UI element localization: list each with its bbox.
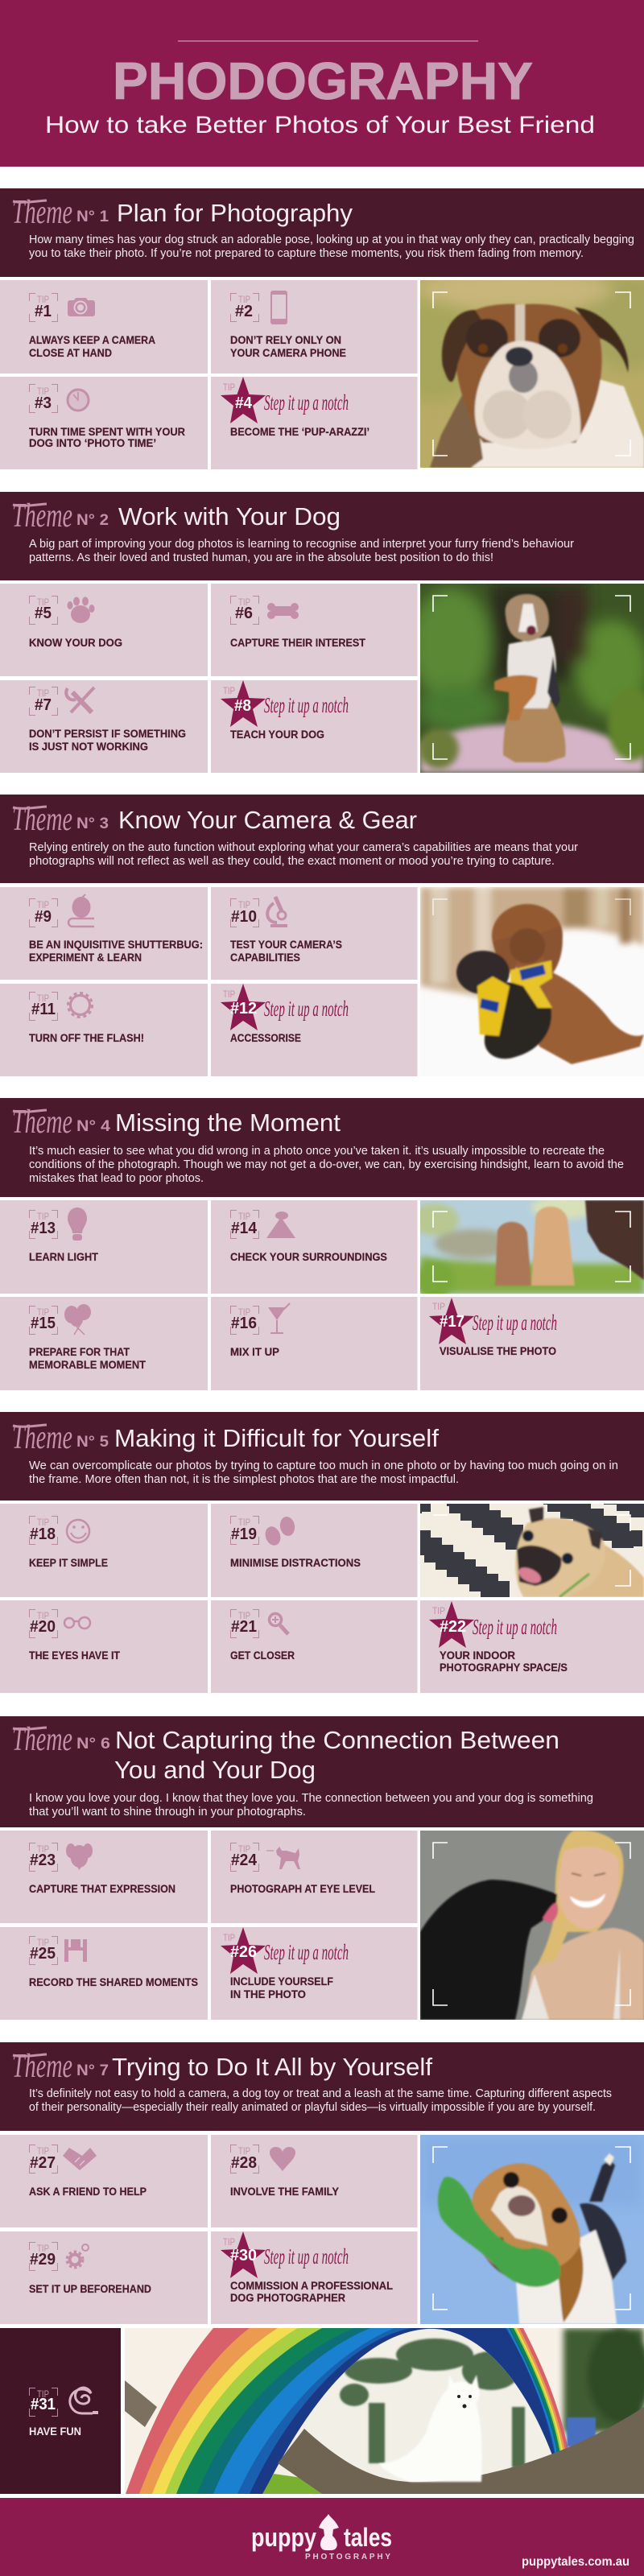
tip 26: TIP <box>223 1932 235 1943</box>
tip 7 <box>0 680 208 773</box>
tip 13: TIP <box>37 1211 49 1222</box>
tip label: EXPERIMENT & LEARN <box>29 952 142 964</box>
tip 18: #18 <box>30 1525 56 1543</box>
tip 20 <box>0 1600 208 1693</box>
icon: martini <box>268 1303 290 1333</box>
tip label: MEMORABLE MOMENT <box>29 1359 147 1371</box>
tip label: ACCESSORISE <box>230 1032 301 1044</box>
theme label: Theme <box>12 801 72 838</box>
panel: theme 3 <box>0 795 644 883</box>
icon: light bulb <box>68 1208 87 1241</box>
tip 24 <box>211 1831 417 1923</box>
tip 3: TIP <box>37 386 49 397</box>
step it up script: Step it up a notch <box>264 1940 349 1964</box>
icon: floppy disk <box>64 1939 87 1962</box>
tip 30: #30 <box>230 2247 257 2264</box>
tip 20: #20 <box>30 1618 56 1636</box>
footer banner <box>0 2498 644 2576</box>
theme label: N° 2 <box>76 512 109 529</box>
tip 13 <box>0 1200 208 1294</box>
icon: mountain <box>266 1212 295 1238</box>
tip 13: #13 <box>31 1220 56 1237</box>
tip 29: #29 <box>30 2251 56 2268</box>
tip label: KNOW YOUR DOG <box>29 637 122 649</box>
tip 4 <box>211 377 417 469</box>
icon: butterfly <box>262 1516 296 1547</box>
step it up script: Step it up a notch <box>264 390 349 415</box>
tip label <box>29 728 186 753</box>
tip 4: #4 <box>235 394 253 412</box>
photo: woman and black dog <box>420 1831 644 2020</box>
tip label: YOUR CAMERA PHONE <box>230 347 346 359</box>
tip label: VISUALISE THE PHOTO <box>440 1345 556 1357</box>
tip 22: TIP <box>432 1605 445 1616</box>
header banner <box>0 0 644 167</box>
icon: paw <box>68 597 95 623</box>
tip 8: TIP <box>223 685 235 696</box>
tip 3 <box>0 377 208 469</box>
tip label: ALWAYS KEEP A CAMERA <box>29 334 155 346</box>
tip 1: TIP <box>37 294 49 305</box>
tip 20: TIP <box>37 1610 49 1621</box>
icon: sun <box>68 993 92 1018</box>
tip 26: #26 <box>230 1943 257 1961</box>
title: PHODOGRAPHY <box>113 52 533 110</box>
tip 5: TIP <box>37 597 49 608</box>
intro text: you to take their photo. If you’re not prepared to capture these moments, you risk them fading from memory. <box>29 247 584 260</box>
tip 21 <box>211 1600 417 1693</box>
tip label: TEST YOUR CAMERA’S <box>230 939 342 951</box>
tip 18 <box>0 1504 208 1597</box>
tip 23: TIP <box>37 1843 49 1855</box>
tip label <box>29 426 185 449</box>
icon: glasses <box>64 1617 90 1629</box>
tip 9 <box>0 887 208 980</box>
tip label: PREPARE FOR THAT <box>29 1346 130 1358</box>
tip 3: #3 <box>35 394 52 412</box>
tip 12 <box>211 984 417 1076</box>
intro text: that you’ll want to shine through in your photographs. <box>29 1806 306 1818</box>
tip 28: TIP <box>238 2145 250 2157</box>
tip label: COMMISSION A PROFESSIONAL <box>230 2280 393 2292</box>
tip 27: #27 <box>30 2154 56 2172</box>
intro text <box>29 1792 593 1818</box>
tip label: ASK A FRIEND TO HELP <box>29 2186 147 2198</box>
icon: handshake <box>63 2148 97 2170</box>
tip label: TURN TIME SPENT WITH YOUR <box>29 426 185 438</box>
photo: bulldog <box>420 280 644 468</box>
tip label: LEARN LIGHT <box>29 1251 99 1263</box>
icon: dog expression <box>66 1843 93 1870</box>
tip 31: #31 <box>31 2396 56 2413</box>
theme label: Theme <box>12 497 72 535</box>
tip 21: #21 <box>231 1618 257 1636</box>
photo: white dog in rainbow <box>125 2326 644 2494</box>
tip 19 <box>211 1504 417 1597</box>
tip 22: #22 <box>440 1618 466 1636</box>
tip 12: #12 <box>230 1000 257 1018</box>
tip label: SET IT UP BEFOREHAND <box>29 2283 151 2295</box>
intro text: It’s much easier to see what you did wrong in a photo once you’ve taken it. it’s usually impossible to recreate the <box>29 1145 605 1158</box>
tip 16: #16 <box>231 1315 257 1332</box>
logo: puppy <box>251 2523 316 2552</box>
heading: You and Your Dog <box>114 1756 316 1784</box>
icon: heart <box>270 2147 295 2171</box>
tip label <box>230 334 346 359</box>
panel: theme 4 <box>0 1098 644 1197</box>
icon: hose spiral <box>70 2388 98 2413</box>
intro text: of their personality—especially their really animated or playful sides—is virtually impossible if you are by yourself. <box>29 2101 596 2114</box>
tip 8 <box>211 680 417 773</box>
heading <box>114 1726 559 1784</box>
tip label: INCLUDE YOURSELF <box>230 1975 333 1988</box>
icon: phone <box>270 291 287 324</box>
tip 11: TIP <box>37 993 49 1004</box>
tip 28 <box>211 2135 417 2227</box>
intro text <box>29 1459 618 1486</box>
tip label: CAPTURE THAT EXPRESSION <box>29 1883 175 1895</box>
tip label: THE EYES HAVE IT <box>29 1649 121 1662</box>
tip 25 <box>0 1927 208 2020</box>
tip 27 <box>0 2135 208 2227</box>
step it up script: Step it up a notch <box>473 1615 557 1639</box>
tip 2: TIP <box>238 294 250 305</box>
intro text: mistakes that lead to poor photos. <box>29 1172 204 1185</box>
tip 6 <box>211 584 417 676</box>
panel: theme 5 <box>0 1412 644 1501</box>
icon: smile <box>67 1520 89 1542</box>
logo dog silhouette <box>319 2514 339 2550</box>
tip label: TEACH YOUR DOG <box>230 729 324 741</box>
intro text: Relying entirely on the auto function without exploring what your camera’s capabilities are means that your <box>29 841 578 854</box>
intro text <box>29 233 634 260</box>
tip label: PHOTOGRAPH AT EYE LEVEL <box>230 1883 375 1895</box>
tip 6: TIP <box>238 597 250 608</box>
tip label: CHECK YOUR SURROUNDINGS <box>230 1251 387 1263</box>
tip label: KEEP IT SIMPLE <box>29 1557 108 1569</box>
intro text: It’s definitely not easy to hold a camera, a dog toy or treat and a leash at the same time. Capturing different aspects <box>29 2087 612 2100</box>
icon: balloons <box>64 1304 91 1335</box>
tip 1 <box>0 280 208 374</box>
theme label: Theme <box>12 1104 72 1141</box>
tip 6: #6 <box>235 605 253 622</box>
tip 17: #17 <box>440 1313 464 1331</box>
tip 10: #10 <box>231 908 257 926</box>
intro text <box>29 841 578 868</box>
tip 24: TIP <box>238 1843 250 1855</box>
theme label: N° 3 <box>76 815 109 832</box>
icon: clock <box>68 390 89 411</box>
logo: PHOTOGRAPHY <box>305 2553 390 2562</box>
tip 8: #8 <box>234 697 251 715</box>
tip 15 <box>0 1297 208 1390</box>
intro text: patterns. As their loved and trusted human, you are in the absolute best position to do this! <box>29 551 493 564</box>
photo: australian shepherd <box>411 584 644 773</box>
tip 14: TIP <box>238 1211 250 1222</box>
tip 23 <box>0 1831 208 1923</box>
heading: Know Your Camera & Gear <box>118 806 417 834</box>
tip 15: TIP <box>37 1307 49 1318</box>
tip label: BE AN INQUISITIVE SHUTTERBUG: <box>29 939 203 951</box>
icon: gears <box>67 2244 89 2268</box>
intro text: the frame. More often than not, it is the simplest photos that are the most impactful. <box>29 1473 459 1486</box>
tip 5 <box>0 584 208 676</box>
tip 10 <box>211 887 417 980</box>
step it up script: Step it up a notch <box>264 2244 349 2268</box>
photo: golden dogs <box>420 1200 644 1294</box>
tip label <box>29 334 155 359</box>
tip 23: #23 <box>30 1852 56 1869</box>
tip label: GET CLOSER <box>230 1649 295 1662</box>
tip 12: TIP <box>223 989 235 1000</box>
tip 1: #1 <box>35 303 52 320</box>
theme label: N° 5 <box>76 1434 109 1451</box>
tip label <box>29 939 203 964</box>
theme label: Theme <box>12 1721 72 1758</box>
tip label: MIX IT UP <box>230 1346 279 1358</box>
theme label: Theme <box>12 1419 72 1456</box>
tip 10: TIP <box>238 899 250 910</box>
tip 28: #28 <box>231 2154 257 2172</box>
panel: theme 2 <box>0 492 644 580</box>
tip 24: #24 <box>231 1852 258 1869</box>
intro text <box>29 1145 624 1185</box>
photo: dogs in snow <box>420 887 644 1076</box>
theme label: N° 7 <box>76 2062 109 2079</box>
photo: pug <box>420 1504 644 1597</box>
step it up script: Step it up a notch <box>264 693 349 717</box>
heading: Work with Your Dog <box>118 502 341 530</box>
tip 15: #15 <box>31 1315 56 1332</box>
tip 29 <box>0 2231 208 2324</box>
icon: apple and book <box>68 894 94 927</box>
tip 4: TIP <box>223 382 235 393</box>
tip 9: TIP <box>37 899 49 910</box>
tip label <box>230 2280 393 2304</box>
heading: Missing the Moment <box>115 1108 341 1137</box>
tip label: HAVE FUN <box>29 2425 81 2438</box>
tip label: CAPABILITIES <box>230 952 300 964</box>
tip 26 <box>211 1927 417 2020</box>
tip 30 <box>211 2231 417 2324</box>
logo <box>251 2514 392 2562</box>
subtitle: How to take Better Photos of Your Best Friend <box>45 112 595 138</box>
icon: tools <box>66 687 94 712</box>
tip 31: TIP <box>37 2388 49 2400</box>
tip label: TURN OFF THE FLASH! <box>29 1032 144 1044</box>
tip label: CAPTURE THEIR INTEREST <box>230 637 366 649</box>
tip 2 <box>211 280 417 374</box>
tip 31 <box>0 2328 121 2494</box>
website: puppytales.com.au <box>522 2555 630 2569</box>
panel: theme 6 <box>0 1716 644 1827</box>
logo: tales <box>344 2523 392 2552</box>
tip 5: #5 <box>35 605 52 622</box>
tip label: DOG INTO ‘PHOTO TIME’ <box>29 437 156 449</box>
tip 11: #11 <box>31 1001 56 1018</box>
intro text: I know you love your dog. I know that they love you. The connection between you and your dog is something <box>29 1792 593 1805</box>
tip 16: TIP <box>238 1307 250 1318</box>
tip 29: TIP <box>37 2243 49 2254</box>
tip 7: #7 <box>35 696 52 714</box>
theme label: Theme <box>12 2048 72 2085</box>
heading: Trying to Do It All by Yourself <box>112 2053 432 2081</box>
tip 9: #9 <box>35 908 52 926</box>
tip label: DON’T RELY ONLY ON <box>230 334 341 346</box>
tip 19: #19 <box>231 1525 257 1543</box>
intro text <box>29 2087 612 2114</box>
tip 25: #25 <box>30 1945 56 1963</box>
tip label <box>230 939 342 964</box>
tip 22 <box>420 1600 644 1693</box>
tip 25: TIP <box>37 1937 49 1948</box>
tip label: CLOSE AT HAND <box>29 347 112 359</box>
heading: Plan for Photography <box>117 199 353 227</box>
tip 16 <box>211 1297 417 1390</box>
icon: bone <box>267 603 299 619</box>
tip label <box>230 1975 333 2000</box>
step it up script: Step it up a notch <box>264 997 349 1021</box>
theme label: Theme <box>12 194 72 231</box>
tip label: BECOME THE ‘PUP-ARAZZI’ <box>230 426 369 438</box>
theme label: N° 4 <box>76 1118 110 1135</box>
tip 17: TIP <box>432 1301 445 1312</box>
tip label: MINIMISE DISTRACTIONS <box>230 1557 361 1569</box>
icon: magnifier <box>269 1613 288 1634</box>
heading: Making it Difficult for Yourself <box>114 1424 439 1452</box>
tip 27: TIP <box>37 2145 49 2157</box>
theme label: N° 1 <box>76 208 109 225</box>
tip label: IS JUST NOT WORKING <box>29 741 148 753</box>
tip label: DON’T PERSIST IF SOMETHING <box>29 728 186 740</box>
tip 30: TIP <box>223 2236 235 2248</box>
tip 14: #14 <box>231 1220 258 1237</box>
tip label: DOG PHOTOGRAPHER <box>230 2292 345 2304</box>
icon: dog at eye level <box>266 1847 300 1869</box>
intro text: photographs will not reflect as well as they could, the exact moment or mood you’re trying to capture. <box>29 855 555 868</box>
tip label: PHOTOGRAPHY SPACE/S <box>440 1662 568 1674</box>
heading: Not Capturing the Connection Between <box>115 1726 559 1754</box>
tip label <box>440 1649 568 1674</box>
theme label: N° 6 <box>76 1736 110 1752</box>
tip 11 <box>0 984 208 1076</box>
tip label: YOUR INDOOR <box>440 1649 515 1662</box>
tip 7: TIP <box>37 687 49 699</box>
tip 14 <box>211 1200 417 1294</box>
icon: camera <box>68 298 95 316</box>
tip 2: #2 <box>235 303 253 320</box>
tip 18: TIP <box>37 1517 49 1528</box>
panel: theme 1 <box>0 188 644 277</box>
intro text: A big part of improving your dog photos is learning to recognise and interpret your furry friend’s behaviour <box>29 538 574 551</box>
tip label: INVOLVE THE FAMILY <box>230 2186 339 2198</box>
intro text: conditions of the photograph. Though we may not get a do-over, we can, by exercising hindsight, learn to avoid the <box>29 1158 624 1171</box>
intro text <box>29 538 574 564</box>
intro text: We can overcomplicate our photos by trying to capture too much in one photo or by having too much going on in <box>29 1459 618 1472</box>
step it up script: Step it up a notch <box>473 1311 557 1335</box>
icon: microscope <box>267 897 287 926</box>
photo: beagle with toy <box>420 2135 644 2324</box>
panel: theme 7 <box>0 2042 644 2131</box>
tip label: IN THE PHOTO <box>230 1988 306 2000</box>
tip 17 <box>420 1297 644 1390</box>
tip 19: TIP <box>238 1517 250 1528</box>
tip 21: TIP <box>238 1610 250 1621</box>
intro text: How many times has your dog struck an adorable pose, looking up at you in that way only they can, practically begging <box>29 233 634 246</box>
tip label <box>29 1346 147 1371</box>
tip label: RECORD THE SHARED MOMENTS <box>29 1976 198 1988</box>
